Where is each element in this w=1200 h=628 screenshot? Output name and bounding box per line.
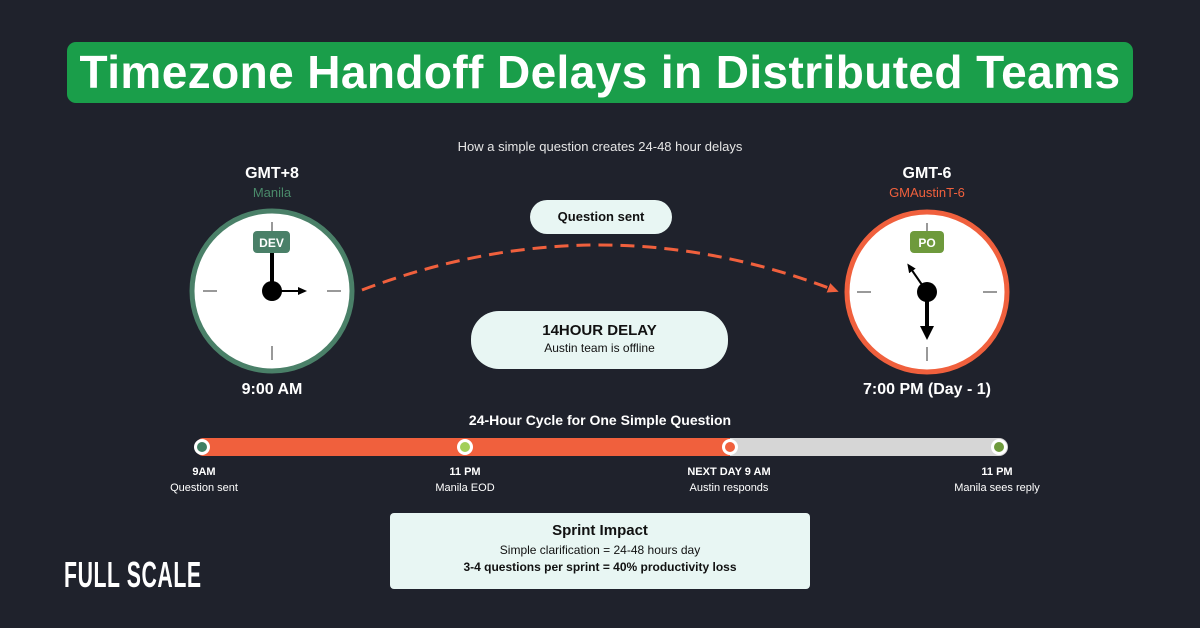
timeline labels: NEXT DAY 9 AM <box>687 466 771 478</box>
arrow: dashed arc <box>362 245 834 290</box>
timeline labels: Question sent <box>170 482 238 494</box>
timeline labels: Manila EOD <box>435 482 495 494</box>
right zone label <box>889 165 965 200</box>
timeline labels <box>170 466 1040 494</box>
delay callout: Austin team is offline <box>544 341 655 355</box>
right time: 7:00 PM (Day - 1) <box>863 381 991 398</box>
right zone label: GMT-6 <box>903 165 951 182</box>
left zone label: GMT+8 <box>245 165 299 182</box>
subtitle: How a simple question creates 24-48 hour delays <box>458 139 742 154</box>
title: Timezone Handoff Delays in Distributed Teams <box>80 46 1120 98</box>
timeline bar <box>194 438 1008 456</box>
right clock: PO <box>918 236 936 250</box>
right zone label: GMAustinT-6 <box>889 185 965 200</box>
timeline labels: 11 PM <box>449 466 481 478</box>
left clock: DEV <box>259 236 284 250</box>
delay callout: 14HOUR DELAY <box>542 322 657 339</box>
timeline labels: Austin responds <box>690 482 768 494</box>
logo: FULL SCALE <box>64 554 202 595</box>
delay callout <box>471 311 728 369</box>
timeline labels: 9AM <box>192 466 216 478</box>
question sent pill: Question sent <box>558 209 644 224</box>
sprint impact box: Simple clarification = 24-48 hours day <box>500 543 700 557</box>
question sent pill <box>530 200 672 234</box>
left zone label: Manila <box>253 185 291 200</box>
sprint impact box <box>390 513 810 589</box>
left zone label <box>245 165 299 200</box>
timeline labels: Manila sees reply <box>954 482 1040 494</box>
sprint impact box: 3-4 questions per sprint = 40% productivity loss <box>463 560 737 574</box>
right clock <box>847 212 1007 372</box>
timeline title: 24-Hour Cycle for One Simple Question <box>469 412 731 428</box>
timeline labels: 11 PM <box>981 466 1013 478</box>
left time: 9:00 AM <box>242 381 302 398</box>
left clock <box>192 211 352 371</box>
sprint impact box: Sprint Impact <box>552 522 648 539</box>
